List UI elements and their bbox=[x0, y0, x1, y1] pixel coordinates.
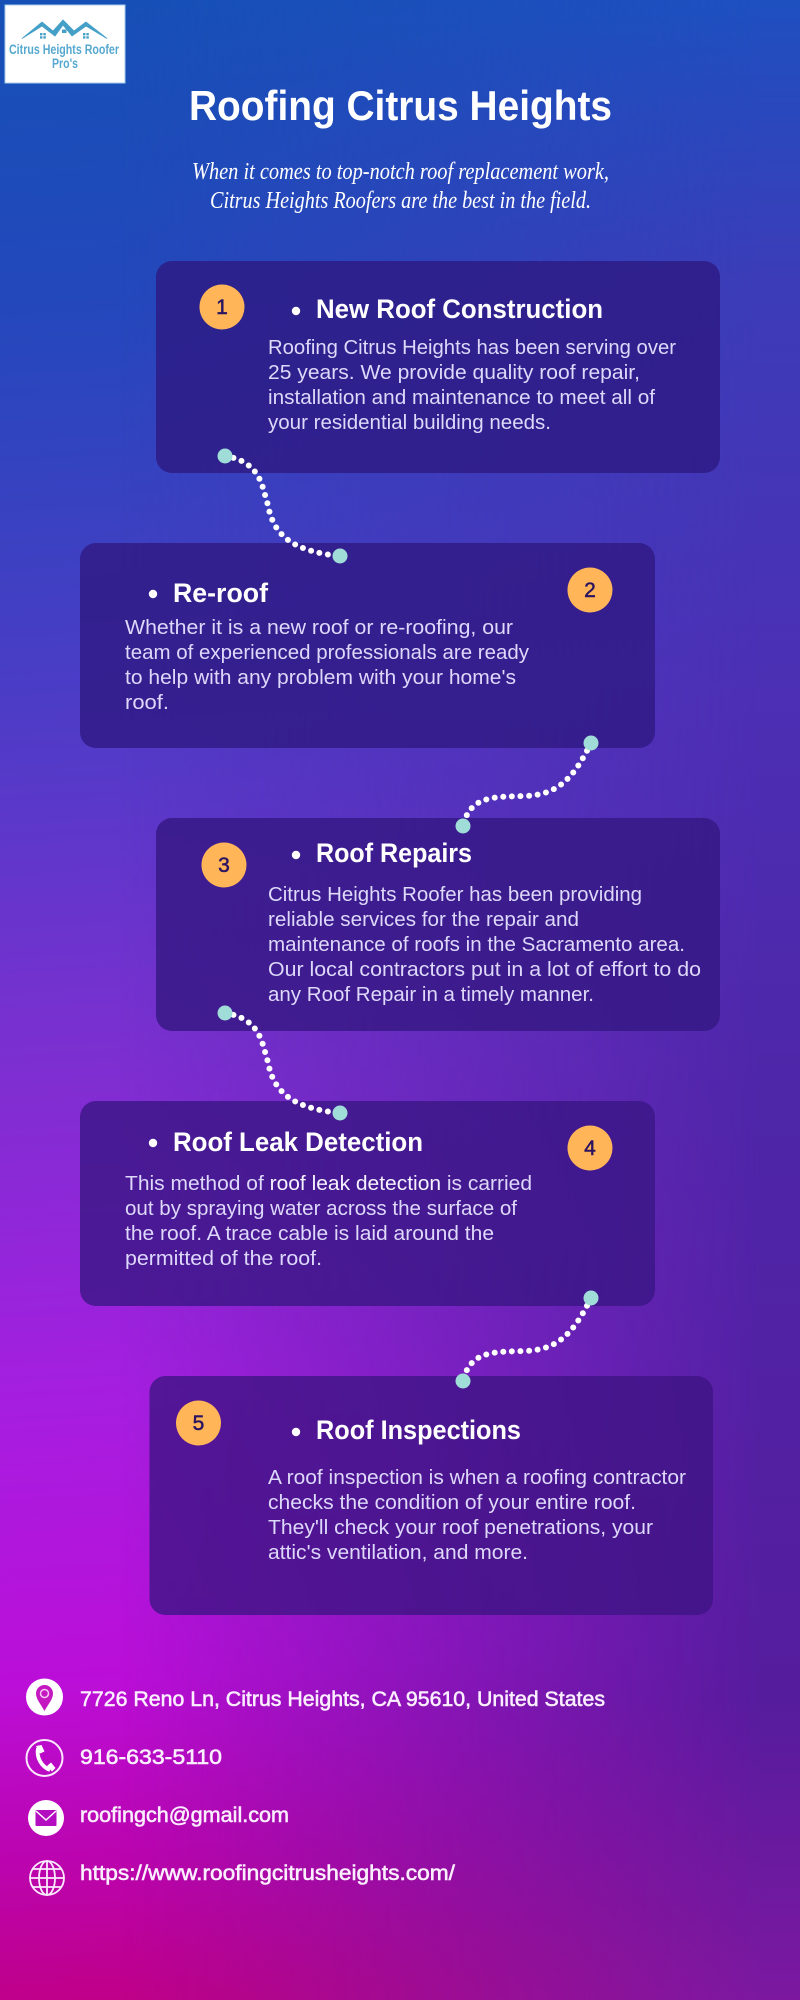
icon: location pin bbox=[26, 1678, 63, 1716]
body text: They'll check your roof penetrations, your bbox=[268, 1516, 653, 1539]
body text: 25 years. We provide quality roof repair, bbox=[268, 361, 640, 384]
heading: Roof Repairs bbox=[316, 838, 472, 868]
body text: your residential building needs. bbox=[268, 411, 551, 434]
body text bbox=[268, 336, 676, 434]
arrow: connector 3 to 4 bbox=[218, 1006, 348, 1120]
body text: to help with any problem with your home's bbox=[125, 666, 516, 689]
icon: globe bbox=[30, 1861, 64, 1895]
icon: envelope bbox=[28, 1800, 64, 1836]
body text: Whether it is a new roof or re-roofing, our bbox=[125, 616, 513, 639]
heading: Roof Leak Detection bbox=[173, 1127, 423, 1157]
address text: 7726 Reno Ln, Citrus Heights, CA 95610, United States bbox=[80, 1688, 605, 1711]
arrow: connector 4 to 5 bbox=[456, 1290, 598, 1388]
body text: This method of roof leak detection is carried bbox=[125, 1172, 532, 1195]
body text: Our local contractors put in a lot of effort to do bbox=[268, 958, 701, 981]
body text bbox=[268, 1466, 686, 1564]
body text: team of experienced professionals are ready bbox=[125, 641, 530, 664]
logo name second line: Pro's bbox=[52, 56, 78, 71]
body text: maintenance of roofs in the Sacramento area. bbox=[268, 933, 685, 956]
badge 5: 5 bbox=[193, 1412, 204, 1435]
body text: any Roof Repair in a timely manner. bbox=[268, 983, 594, 1006]
badge 2: 2 bbox=[584, 579, 596, 602]
panel: new roof construction bbox=[156, 261, 720, 473]
body text: A roof inspection is when a roofing contractor bbox=[268, 1466, 686, 1489]
body text: the roof. A trace cable is laid around the bbox=[125, 1222, 494, 1245]
body text: Roofing Citrus Heights has been serving over bbox=[268, 336, 676, 359]
panel: roof repairs bbox=[156, 818, 720, 1031]
tagline: When it comes to top-notch roof replacement work, bbox=[192, 159, 609, 185]
body text: attic's ventilation, and more. bbox=[268, 1541, 528, 1564]
phone number: 916-633-5110 bbox=[80, 1746, 222, 1769]
badge 4 bbox=[568, 1126, 612, 1170]
badge 2 bbox=[568, 568, 612, 612]
email address: roofingch@gmail.com bbox=[80, 1804, 289, 1827]
website url: https://www.roofingcitrusheights.com/ bbox=[80, 1862, 455, 1885]
body text: checks the condition of your entire roof. bbox=[268, 1491, 636, 1514]
panel: roof inspections bbox=[150, 1376, 713, 1615]
logo name: Citrus Heights Roofer bbox=[9, 42, 120, 57]
arrow: connector 2 to 3 bbox=[456, 736, 598, 834]
body text: permitted of the roof. bbox=[125, 1247, 322, 1270]
body text bbox=[125, 1172, 532, 1270]
badge 3: 3 bbox=[218, 854, 230, 877]
body text: installation and maintenance to meet all of bbox=[268, 386, 655, 409]
body text: roof. bbox=[125, 691, 169, 714]
body text: reliable services for the repair and bbox=[268, 908, 579, 931]
icon: phone bbox=[26, 1740, 62, 1776]
contact: email bbox=[28, 1800, 289, 1836]
contact: address bbox=[26, 1678, 605, 1716]
body text bbox=[125, 616, 530, 714]
title: Roofing Citrus Heights bbox=[189, 82, 612, 129]
tagline: Citrus Heights Roofers are the best in the field. bbox=[210, 188, 591, 214]
body text: Citrus Heights Roofer has been providing bbox=[268, 883, 642, 906]
badge 4: 4 bbox=[584, 1137, 596, 1160]
icon: three house roofs bbox=[22, 20, 107, 39]
badge 1: 1 bbox=[216, 296, 228, 319]
logo bbox=[5, 5, 125, 83]
badge 5 bbox=[176, 1400, 221, 1446]
body text: out by spraying water across the surface of bbox=[125, 1197, 517, 1220]
heading: Roof Inspections bbox=[316, 1415, 521, 1445]
heading: Re-roof bbox=[173, 578, 269, 608]
panel: roof leak detection bbox=[80, 1101, 655, 1306]
body text bbox=[268, 883, 701, 1006]
tagline bbox=[192, 159, 609, 214]
contact: phone bbox=[26, 1740, 222, 1776]
contact: website bbox=[30, 1861, 455, 1895]
arrow: connector 1 to 2 bbox=[218, 448, 348, 564]
badge 1 bbox=[200, 284, 244, 330]
heading: New Roof Construction bbox=[316, 294, 603, 324]
badge 3 bbox=[202, 842, 246, 888]
panel: re-roof bbox=[80, 543, 655, 748]
